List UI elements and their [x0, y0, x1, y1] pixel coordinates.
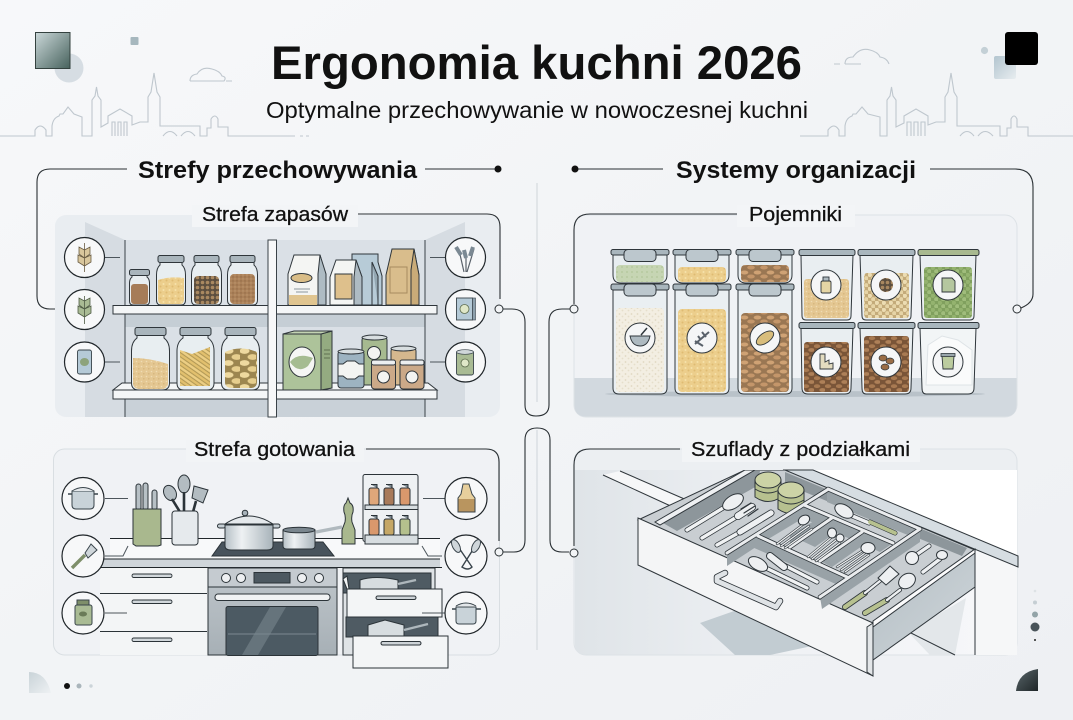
large pot: [218, 510, 280, 550]
green containers: [755, 472, 804, 514]
drawer handle: [717, 573, 780, 607]
cooktop: [212, 542, 334, 556]
container column 6: [918, 250, 979, 394]
container column 3: [736, 250, 794, 394]
icon links: [105, 258, 445, 362]
skyline: right: [800, 49, 1073, 136]
decor: top-left shapes: [36, 32, 138, 82]
center divider: [536, 183, 538, 650]
counter: [100, 538, 442, 568]
drawer scene background: [575, 470, 1018, 655]
open pot drawers: [343, 568, 448, 668]
icon: lavender sprigs: [446, 238, 486, 278]
heading: cooking zone: Strefa gotowania: [194, 439, 356, 461]
icon: box: [446, 290, 486, 330]
lower jars: [132, 328, 260, 390]
container column 4: [799, 250, 855, 394]
subtitle: Optymalne przechowywanie w nowoczesnej kuchni: [266, 97, 808, 123]
panel: drawers: [574, 449, 1018, 676]
container column 1: [611, 250, 669, 394]
decor: bottom-right corner: [1016, 669, 1038, 691]
heading: containers: Pojemniki: [749, 204, 842, 226]
icon: spatula: [62, 535, 104, 577]
icon: jar: [62, 592, 104, 634]
decor: bottom dots: [64, 683, 93, 689]
icon: salt shaker: [445, 478, 487, 520]
icon links: [105, 498, 445, 613]
decor: bottom-left corner: [29, 672, 51, 693]
utensils right compartments: [832, 501, 948, 613]
container column 2: [673, 250, 731, 394]
skyline: left: [0, 68, 310, 136]
green cereal box: [283, 331, 332, 390]
upper jars: [130, 256, 258, 305]
title: Ergonomia kuchni 2026: [271, 36, 802, 89]
icon: green can: [446, 342, 486, 382]
pepper mill: [342, 498, 355, 544]
icon: covered pot: [445, 592, 487, 634]
panel: containers: [574, 215, 1017, 417]
decor: top-right shapes: [981, 32, 1038, 79]
heading: dividers drawers: Szuflady z podziałkami: [691, 439, 910, 461]
left cabinets: [100, 568, 208, 655]
upper shelf: [113, 306, 437, 314]
utensils center compartments: [777, 513, 875, 572]
icon: can with leaf: [64, 342, 104, 382]
packaged bags: [288, 249, 419, 305]
heading: pantry zone: Strefa zapasów: [202, 204, 349, 226]
container column 5: [858, 250, 915, 394]
spice rack: [363, 474, 418, 544]
cans: [338, 335, 424, 389]
heading: organization systems: Systemy organizacji: [676, 157, 916, 184]
compartment rims: [727, 489, 920, 597]
drawer body: [638, 470, 975, 676]
icon: wheat: [64, 238, 104, 278]
drawer: [638, 470, 975, 676]
utensils lower compartment: [746, 554, 817, 588]
panel: cooking zone: [54, 449, 500, 668]
center post: [268, 240, 276, 417]
panel: pantry zone: [55, 215, 500, 417]
heading: storage zones: Strefy przechowywania: [138, 157, 418, 184]
decor: right dots: [1030, 590, 1040, 641]
saucepan: [283, 527, 342, 549]
icon: tongs: [445, 535, 487, 577]
connector nodes: [494, 166, 1021, 557]
lower shelf: [113, 383, 437, 399]
compartment walls: [727, 490, 920, 609]
icon: herb: [64, 290, 104, 330]
utensils left compartment: [687, 490, 771, 545]
knife block: [133, 483, 161, 546]
icon: pot: [62, 478, 104, 520]
connector lines: [37, 169, 1033, 552]
oven: [208, 568, 337, 656]
pantry walls: [85, 222, 465, 417]
utensil holder: [161, 475, 208, 545]
